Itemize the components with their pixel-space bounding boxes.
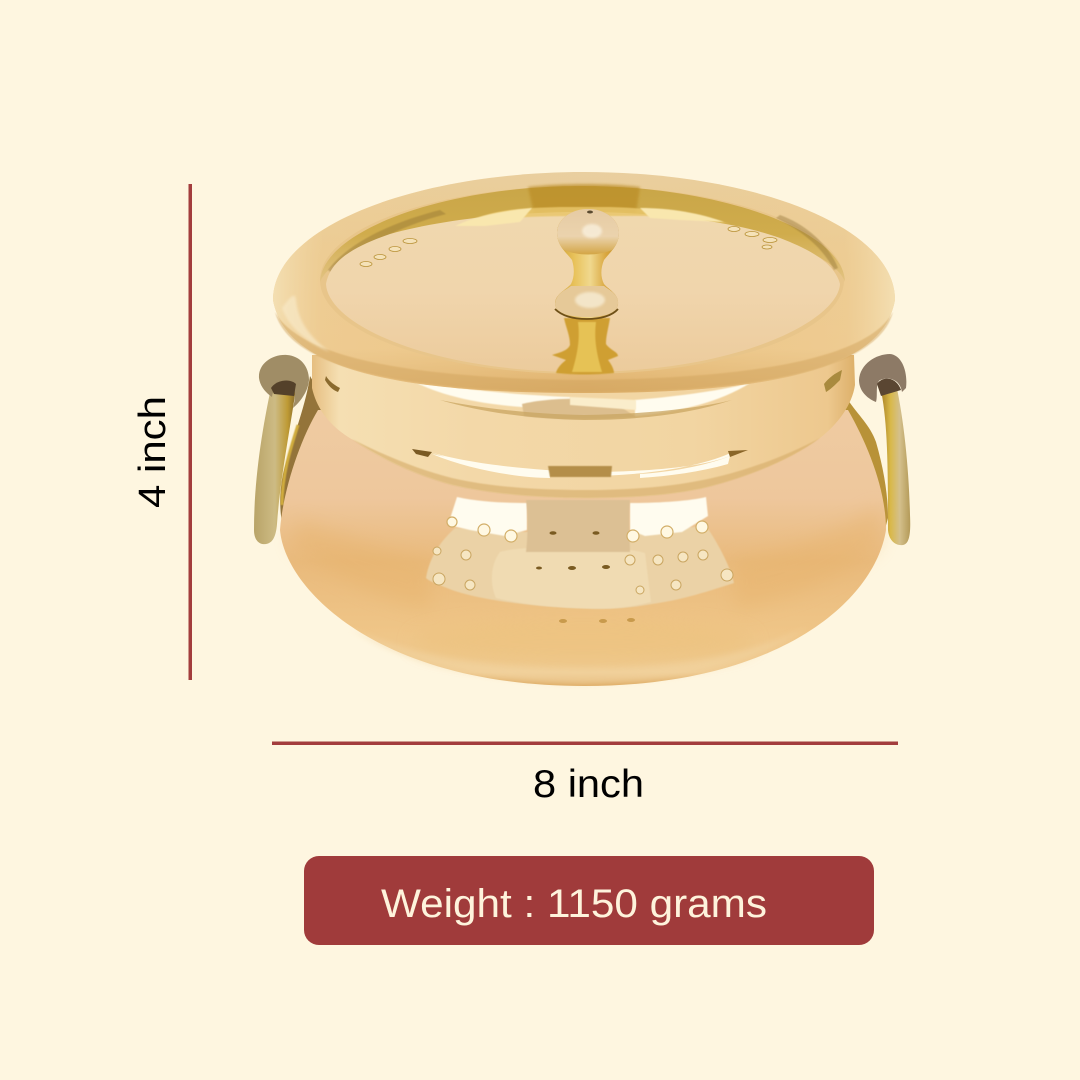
width label: 8 inch xyxy=(533,763,644,806)
weight badge xyxy=(304,856,874,945)
right ring handle xyxy=(843,354,910,545)
lower collar groove highlights xyxy=(412,449,748,478)
left ring handle xyxy=(254,355,324,544)
pot bowl xyxy=(280,410,886,686)
lid rim xyxy=(273,172,895,393)
knob reflection xyxy=(552,318,618,374)
weight text: Weight : 1150 grams xyxy=(381,882,767,926)
upper collar highlights xyxy=(411,380,750,420)
width dimension line xyxy=(272,742,898,745)
top gold band on floor xyxy=(470,207,730,224)
lid knob xyxy=(555,209,619,319)
height label: 4 inch xyxy=(132,396,174,508)
lid hammered floor xyxy=(326,207,840,374)
lid interior wall xyxy=(320,186,844,374)
height dimension line xyxy=(188,184,192,680)
neck collar xyxy=(312,355,855,498)
brass pot illustration xyxy=(254,172,910,686)
bowl reflection with dimples xyxy=(426,497,734,623)
